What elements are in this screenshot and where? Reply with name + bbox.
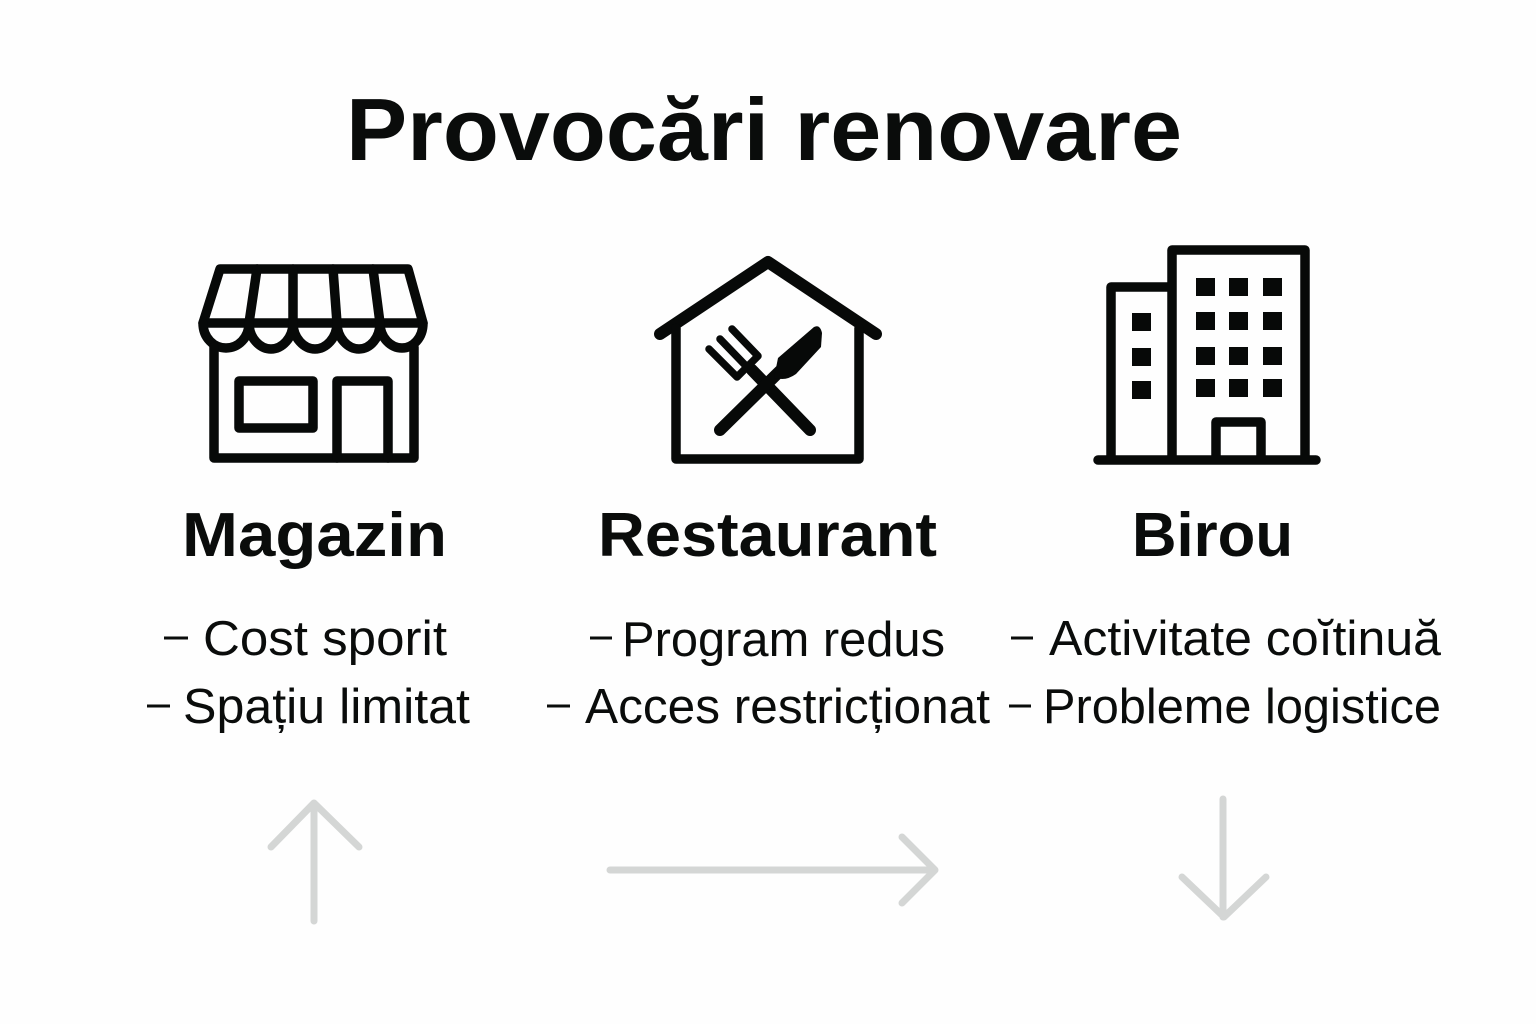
icon: storefront <box>203 269 423 458</box>
panel: Magazin <box>147 269 470 734</box>
list: Restaurant challenges: Acces restricționat <box>585 680 990 734</box>
list: Magazin challenges <box>147 612 470 734</box>
title: Provocări renovare <box>346 80 1182 179</box>
heading: Birou: Birou <box>1132 501 1293 570</box>
list: Magazin challenges: Spațiu limitat <box>183 680 470 734</box>
arrow: down <box>1182 799 1266 917</box>
arrow: right <box>610 837 935 903</box>
list: Birou challenges <box>1009 612 1442 734</box>
heading: Restaurant: Restaurant <box>598 501 937 570</box>
icon: office buildings <box>1098 250 1316 460</box>
list: Birou challenges: Probleme logistice <box>1043 680 1441 734</box>
list: Restaurant challenges: Program redus <box>622 613 945 667</box>
list: Magazin challenges: Cost sporit <box>203 612 447 666</box>
arrow: up <box>271 803 359 921</box>
heading: Magazin: Magazin <box>182 501 447 570</box>
panel: Restaurant <box>547 262 990 734</box>
list: Restaurant challenges <box>547 613 990 734</box>
panel: Birou <box>1009 250 1442 734</box>
icon: restaurant house <box>660 262 876 459</box>
list: Birou challenges: Activitate coĭtinuă <box>1049 612 1442 666</box>
